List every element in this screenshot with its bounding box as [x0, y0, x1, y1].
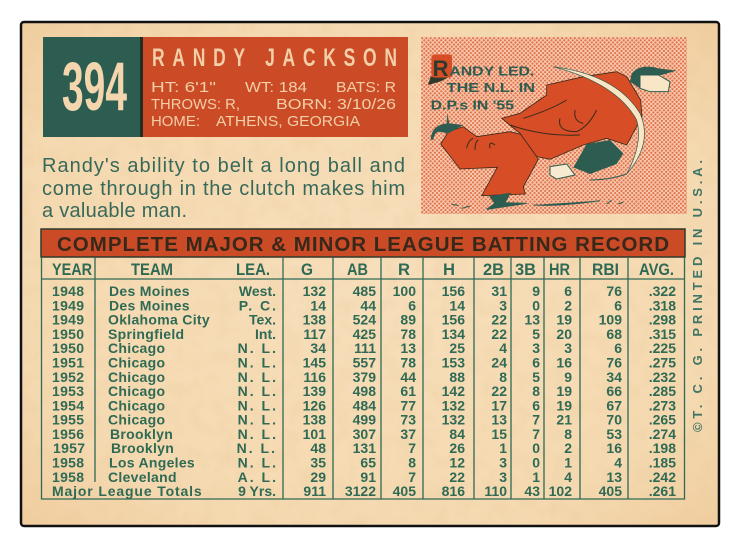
- table rows: 126: [303, 397, 326, 413]
- cartoon glove: [431, 113, 463, 140]
- table rows: .265: [649, 412, 676, 428]
- table rows: 44: [360, 297, 376, 313]
- table rows: 139: [303, 383, 326, 399]
- table rows: 78: [400, 326, 416, 342]
- table rows: 1: [499, 440, 507, 456]
- table rows: 8: [408, 454, 416, 470]
- table rows: 13: [606, 469, 622, 485]
- table rows: 0: [532, 297, 540, 313]
- table rows: 73: [400, 412, 416, 428]
- table rows: 25: [449, 340, 465, 356]
- table rows: 22: [449, 469, 465, 485]
- table rows: 0: [532, 440, 540, 456]
- table rows: Des Moines: [109, 297, 190, 313]
- table rows: 3: [499, 454, 507, 470]
- table rows: 35: [310, 454, 326, 470]
- table rows: 8: [499, 369, 507, 385]
- table rows: 13: [400, 340, 416, 356]
- table rows: 1949: [52, 312, 84, 328]
- totals row: 9 Yrs.: [238, 483, 276, 499]
- table rows: 153: [442, 354, 465, 370]
- table rows: 1956: [52, 426, 84, 442]
- table rows: .185: [649, 454, 676, 470]
- table rows: 7: [408, 469, 416, 485]
- table rows: 100: [393, 283, 416, 299]
- table rows: 88: [449, 369, 465, 385]
- table rows: 6: [614, 340, 622, 356]
- table rows: .274: [649, 426, 676, 442]
- table rows: 70: [606, 412, 622, 428]
- table rows: 142: [442, 383, 465, 399]
- table rows: 16: [556, 354, 572, 370]
- cartoon big letter R: [428, 54, 452, 85]
- table rows: 3: [532, 340, 540, 356]
- table rows: N. L.: [238, 454, 278, 470]
- table rows: 111: [354, 340, 376, 356]
- totals row: .261: [649, 483, 676, 499]
- table rows: 22: [491, 312, 507, 328]
- cartoon bat swing: [553, 67, 644, 174]
- table rows: Des Moines: [109, 283, 190, 299]
- table rows: 77: [400, 397, 416, 413]
- table rows: 1952: [52, 369, 84, 385]
- player vitals: [151, 79, 396, 130]
- table header: TEAM: [131, 261, 173, 279]
- table rows: .315: [649, 326, 676, 342]
- table rows: 89: [400, 312, 416, 328]
- text block: player blurb: [42, 155, 405, 222]
- table rows: 1949: [52, 297, 84, 313]
- cartoon caption: D.P.s IN '55: [431, 98, 514, 112]
- table rows: 1: [532, 469, 540, 485]
- table rows: 26: [449, 440, 465, 456]
- table header: R: [398, 261, 410, 279]
- table rows: Chicago: [108, 354, 165, 370]
- table grid: [42, 257, 684, 499]
- totals row: Major League Totals: [52, 483, 202, 499]
- table rows: West.: [239, 283, 276, 299]
- table rows: 9: [564, 369, 572, 385]
- table rows: Int.: [255, 326, 276, 342]
- player vitals: THROWS: R,: [151, 96, 240, 113]
- table rows: 524: [353, 312, 376, 328]
- table rows: Chicago: [108, 369, 165, 385]
- table rows: Brooklyn: [110, 426, 173, 442]
- table rows: 138: [303, 312, 326, 328]
- player vitals: BORN: 3/10/26: [276, 96, 396, 113]
- table rows: 31: [491, 283, 507, 299]
- panel: stats table: [42, 257, 684, 499]
- table rows: 5: [532, 326, 540, 342]
- table rows: N. L.: [238, 426, 278, 442]
- table header: 2B: [483, 261, 504, 279]
- vertical print credit: ©T. C. G. PRINTED IN U.S.A.: [690, 160, 705, 432]
- cartoon hand: [550, 164, 575, 179]
- table rows: Tex.: [249, 312, 276, 328]
- table rows: 22: [491, 383, 507, 399]
- table rows: Los Angeles: [109, 454, 195, 470]
- table rows: Cleveland: [108, 469, 177, 485]
- text block: player blurb: Randy's ability to belt a long ball and: [42, 155, 405, 177]
- table rows: 14: [310, 297, 326, 313]
- table rows: 22: [491, 326, 507, 342]
- text block: player blurb: come through in the clutch makes him: [42, 178, 405, 200]
- totals row: 102: [549, 483, 572, 499]
- table rows: 84: [449, 426, 465, 442]
- table rows: .318: [649, 297, 676, 313]
- table rows: 1953: [52, 383, 84, 399]
- table rows: 498: [353, 383, 376, 399]
- table header: [52, 261, 674, 279]
- totals row: 3122: [345, 483, 376, 499]
- player vitals: HT: 6'1": [151, 79, 216, 96]
- cartoon face: [640, 75, 670, 92]
- table rows: 499: [353, 412, 376, 428]
- table rows: N. L.: [238, 412, 278, 428]
- table rows: 1950: [52, 340, 84, 356]
- table rows: 1958: [52, 469, 84, 485]
- table rows: 109: [599, 312, 622, 328]
- table rows: 53: [606, 426, 622, 442]
- table rows: .232: [649, 369, 676, 385]
- totals row: 110: [484, 483, 507, 499]
- table rows: 2: [564, 440, 572, 456]
- table rows: 484: [353, 397, 376, 413]
- table rows: 3: [499, 469, 507, 485]
- table rows: Chicago: [108, 412, 165, 428]
- table rows: 485: [353, 283, 376, 299]
- cartoon jacket: [502, 72, 642, 159]
- table rows: 156: [442, 283, 465, 299]
- table rows: 379: [353, 369, 376, 385]
- table rows: 8: [532, 383, 540, 399]
- table rows: Brooklyn: [111, 440, 174, 456]
- table rows: 1958: [52, 454, 84, 470]
- table rows: 1957: [53, 440, 85, 456]
- totals row: 405: [393, 483, 416, 499]
- table header: 3B: [515, 261, 536, 279]
- table rows: 14: [449, 297, 465, 313]
- table rows: 3: [564, 340, 572, 356]
- table rows: .285: [649, 383, 676, 399]
- table rows: 20: [556, 326, 572, 342]
- table rows: 138: [303, 412, 326, 428]
- panel: card number: [43, 37, 143, 137]
- table rows: 44: [400, 369, 416, 385]
- table rows: 2: [564, 297, 572, 313]
- player vitals: BATS: R: [336, 79, 396, 96]
- player vitals: WT: 184: [245, 79, 307, 96]
- table rows: .298: [649, 312, 676, 328]
- table rows: 65: [360, 454, 376, 470]
- table rows: 4: [564, 469, 572, 485]
- panel: record title banner: COMPLETE MAJOR & MINOR LEAGUE BATTING RECORD: [57, 233, 669, 256]
- cartoon caption: THE N.L. IN: [447, 81, 535, 95]
- table header: LEA.: [236, 261, 270, 279]
- table rows: Springfield: [108, 326, 184, 342]
- table rows: 132: [442, 397, 465, 413]
- totals row: [52, 483, 676, 499]
- table rows: 15: [491, 426, 507, 442]
- table rows: 101: [303, 426, 326, 442]
- table rows: 4: [499, 340, 507, 356]
- table rows: 4: [614, 454, 622, 470]
- player name: RANDY JACKSON: [152, 43, 397, 72]
- table rows: 13: [491, 412, 507, 428]
- table rows: 1950: [52, 326, 84, 342]
- cartoon caption: ANDY LED.: [449, 65, 534, 79]
- table rows: 425: [353, 326, 376, 342]
- player vitals: HOME:: [151, 113, 200, 130]
- table rows: 6: [532, 354, 540, 370]
- table rows: 6: [532, 397, 540, 413]
- table rows: 6: [408, 297, 416, 313]
- table rows: Chicago: [108, 383, 165, 399]
- table rows: 48: [310, 440, 326, 456]
- table rows: 37: [400, 426, 416, 442]
- table rows: N. L.: [238, 397, 278, 413]
- text block: player blurb: a valuable man.: [42, 200, 187, 222]
- panel: card number: 394: [62, 48, 127, 125]
- table header: HR: [549, 261, 570, 279]
- table rows: N. L.: [238, 369, 278, 385]
- cartoon big letter R: R: [433, 56, 449, 81]
- table rows: 1948: [52, 283, 84, 299]
- table rows: 61: [400, 383, 416, 399]
- table rows: 76: [606, 283, 622, 299]
- table rows: 19: [556, 397, 572, 413]
- table rows: 6: [614, 297, 622, 313]
- table rows: 66: [606, 383, 622, 399]
- table rows: 8: [564, 426, 572, 442]
- panel: player details: [143, 37, 408, 137]
- table rows: .242: [649, 469, 676, 485]
- table rows: Chicago: [108, 340, 165, 356]
- table rows: 1: [564, 454, 572, 470]
- table rows: 134: [442, 326, 465, 342]
- table rows: 117: [303, 326, 326, 342]
- table rows: 16: [606, 440, 622, 456]
- table rows: 132: [303, 283, 326, 299]
- table rows: 9: [532, 283, 540, 299]
- table rows: .198: [649, 440, 676, 456]
- table header: G: [301, 261, 313, 279]
- table rows: Oklahoma City: [108, 312, 210, 328]
- table rows: 6: [564, 283, 572, 299]
- panel: cartoon: [421, 37, 687, 214]
- table rows: 0: [532, 454, 540, 470]
- table rows: 13: [524, 312, 540, 328]
- table rows: 145: [303, 354, 326, 370]
- table rows: 19: [556, 383, 572, 399]
- totals row: 911: [303, 483, 326, 499]
- table rows: 7: [532, 412, 540, 428]
- table rows: 1954: [52, 397, 84, 413]
- table rows: 29: [310, 469, 326, 485]
- player vitals: ATHENS, GEORGIA: [216, 113, 360, 130]
- table rows: 78: [400, 354, 416, 370]
- table rows: 12: [449, 454, 465, 470]
- table rows: 17: [491, 397, 507, 413]
- table rows: 1955: [52, 412, 84, 428]
- table header: RBI: [592, 261, 619, 279]
- table rows: 132: [442, 412, 465, 428]
- table rows: 76: [606, 354, 622, 370]
- table rows: [52, 283, 676, 499]
- table rows: N. L.: [238, 340, 278, 356]
- table rows: N. L.: [238, 354, 278, 370]
- table rows: 34: [310, 340, 326, 356]
- cartoon foot and ground: [452, 193, 623, 209]
- table rows: 7: [408, 440, 416, 456]
- table rows: 68: [606, 326, 622, 342]
- table rows: 156: [442, 312, 465, 328]
- table rows: 557: [353, 354, 376, 370]
- table rows: 24: [491, 354, 507, 370]
- totals row: 816: [442, 483, 465, 499]
- table rows: .273: [649, 397, 676, 413]
- table rows: 7: [532, 426, 540, 442]
- cartoon cap: [630, 67, 677, 88]
- table rows: .322: [649, 283, 676, 299]
- table rows: .225: [649, 340, 676, 356]
- table rows: 21: [556, 412, 572, 428]
- table header: H: [443, 261, 455, 279]
- table rows: N. L.: [238, 383, 278, 399]
- table rows: 3: [499, 297, 507, 313]
- cartoon arm: [573, 140, 623, 174]
- totals row: 405: [599, 483, 622, 499]
- table rows: 5: [532, 369, 540, 385]
- table header: YEAR: [52, 261, 92, 279]
- table header: AB: [347, 261, 368, 279]
- table rows: 307: [353, 426, 376, 442]
- table rows: 131: [353, 440, 376, 456]
- table rows: 34: [606, 369, 622, 385]
- table rows: 19: [556, 312, 572, 328]
- table rows: P. C.: [239, 297, 278, 313]
- cartoon leg: [441, 127, 538, 196]
- table header: AVG.: [639, 261, 674, 279]
- table rows: 1951: [52, 354, 84, 370]
- table rows: 67: [606, 397, 622, 413]
- table rows: Chicago: [108, 397, 165, 413]
- table rows: 116: [303, 369, 326, 385]
- table rows: 91: [360, 469, 376, 485]
- table rows: .275: [649, 354, 676, 370]
- cartoon caption: [431, 65, 535, 112]
- table rows: N. L.: [237, 440, 277, 456]
- totals row: 43: [524, 483, 540, 499]
- table rows: A. L.: [238, 469, 278, 485]
